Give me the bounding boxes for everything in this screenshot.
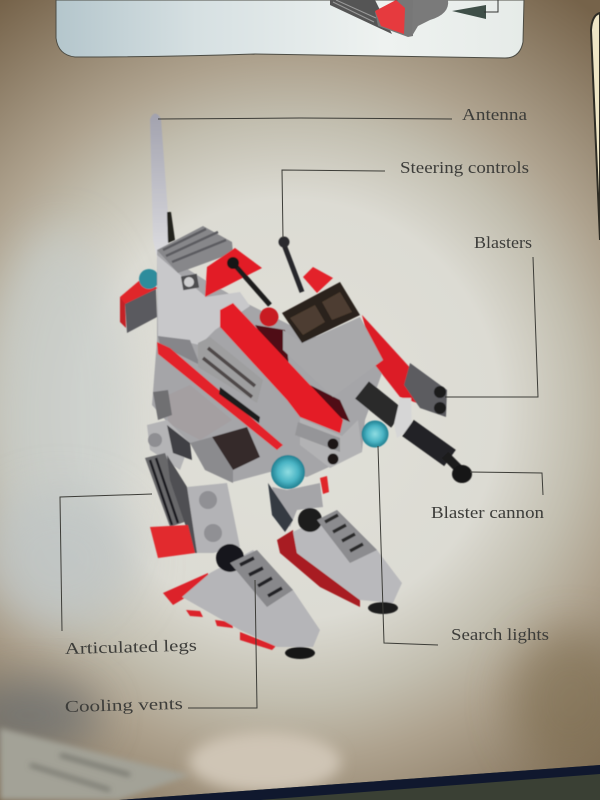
next page edge at right bbox=[591, 13, 600, 240]
bottom page edge bbox=[119, 765, 600, 800]
part: search light left bbox=[271, 455, 305, 489]
leader line: cooling vents bbox=[188, 580, 257, 708]
part: top vent block bbox=[157, 226, 233, 273]
part: white connector bbox=[394, 398, 412, 438]
label: blaster cannon: Blaster cannon bbox=[431, 503, 544, 522]
label: steering controls: Steering controls bbox=[400, 158, 529, 177]
part: left side blaster block bbox=[120, 269, 159, 333]
robot walker model bbox=[120, 114, 472, 659]
label: antenna: Antenna bbox=[462, 105, 528, 124]
label: articulated legs: Articulated legs bbox=[65, 636, 197, 658]
part: red leg block bbox=[150, 525, 195, 558]
part: blaster cannon bbox=[408, 428, 472, 483]
part: upper leg joints bbox=[147, 390, 192, 470]
part: lower torso front bbox=[295, 418, 362, 468]
part: rear foot bbox=[277, 508, 402, 614]
part: center cannon barrel bbox=[362, 390, 398, 419]
part: torso hull bbox=[152, 250, 385, 482]
part: upper red tab bbox=[303, 267, 333, 293]
part: control stick left bbox=[227, 257, 270, 305]
part: head square stud bbox=[181, 274, 199, 290]
part: shadowed lower hull bbox=[168, 385, 232, 440]
label: cooling vents: Cooling vents bbox=[65, 694, 183, 716]
part: front foot bbox=[163, 544, 320, 659]
part: side vent bbox=[198, 337, 263, 423]
label: search lights: Search lights bbox=[451, 625, 549, 644]
part: grey cockpit hull bbox=[283, 317, 383, 397]
icon: brick assembly detail bbox=[330, 0, 448, 37]
part: red head wedge bbox=[205, 248, 262, 297]
part: small black spike bbox=[167, 212, 175, 243]
part: leg vent panel bbox=[145, 453, 190, 527]
leader line: antenna bbox=[158, 118, 452, 119]
part: search light right bbox=[362, 420, 388, 448]
part: dark shadow behind bar bbox=[255, 325, 350, 422]
label: blasters: Blasters bbox=[474, 233, 532, 252]
leader line: articulated legs bbox=[60, 494, 152, 631]
part: right red bar bbox=[362, 315, 423, 403]
part: twin blaster barrels bbox=[404, 363, 447, 417]
top instruction panel bbox=[56, 0, 524, 58]
part: tinted window bbox=[282, 282, 360, 343]
leader line: blaster cannon bbox=[470, 472, 543, 495]
part: main red bar bbox=[220, 303, 343, 433]
part: dark thigh block bbox=[212, 427, 260, 470]
part: front leg bbox=[167, 455, 240, 553]
part: control stick right bbox=[278, 236, 302, 292]
leader line: search lights bbox=[378, 446, 438, 645]
part: antenna bbox=[150, 114, 170, 262]
arrow: insertion direction bbox=[452, 0, 498, 19]
leader line: steering controls bbox=[282, 170, 385, 238]
part: grey thigh plate bbox=[190, 437, 233, 483]
leader line: blasters bbox=[445, 257, 538, 397]
part: red lower strip bbox=[157, 342, 283, 450]
part: rear leg bbox=[268, 476, 329, 532]
part: red ball joint bbox=[260, 308, 278, 326]
